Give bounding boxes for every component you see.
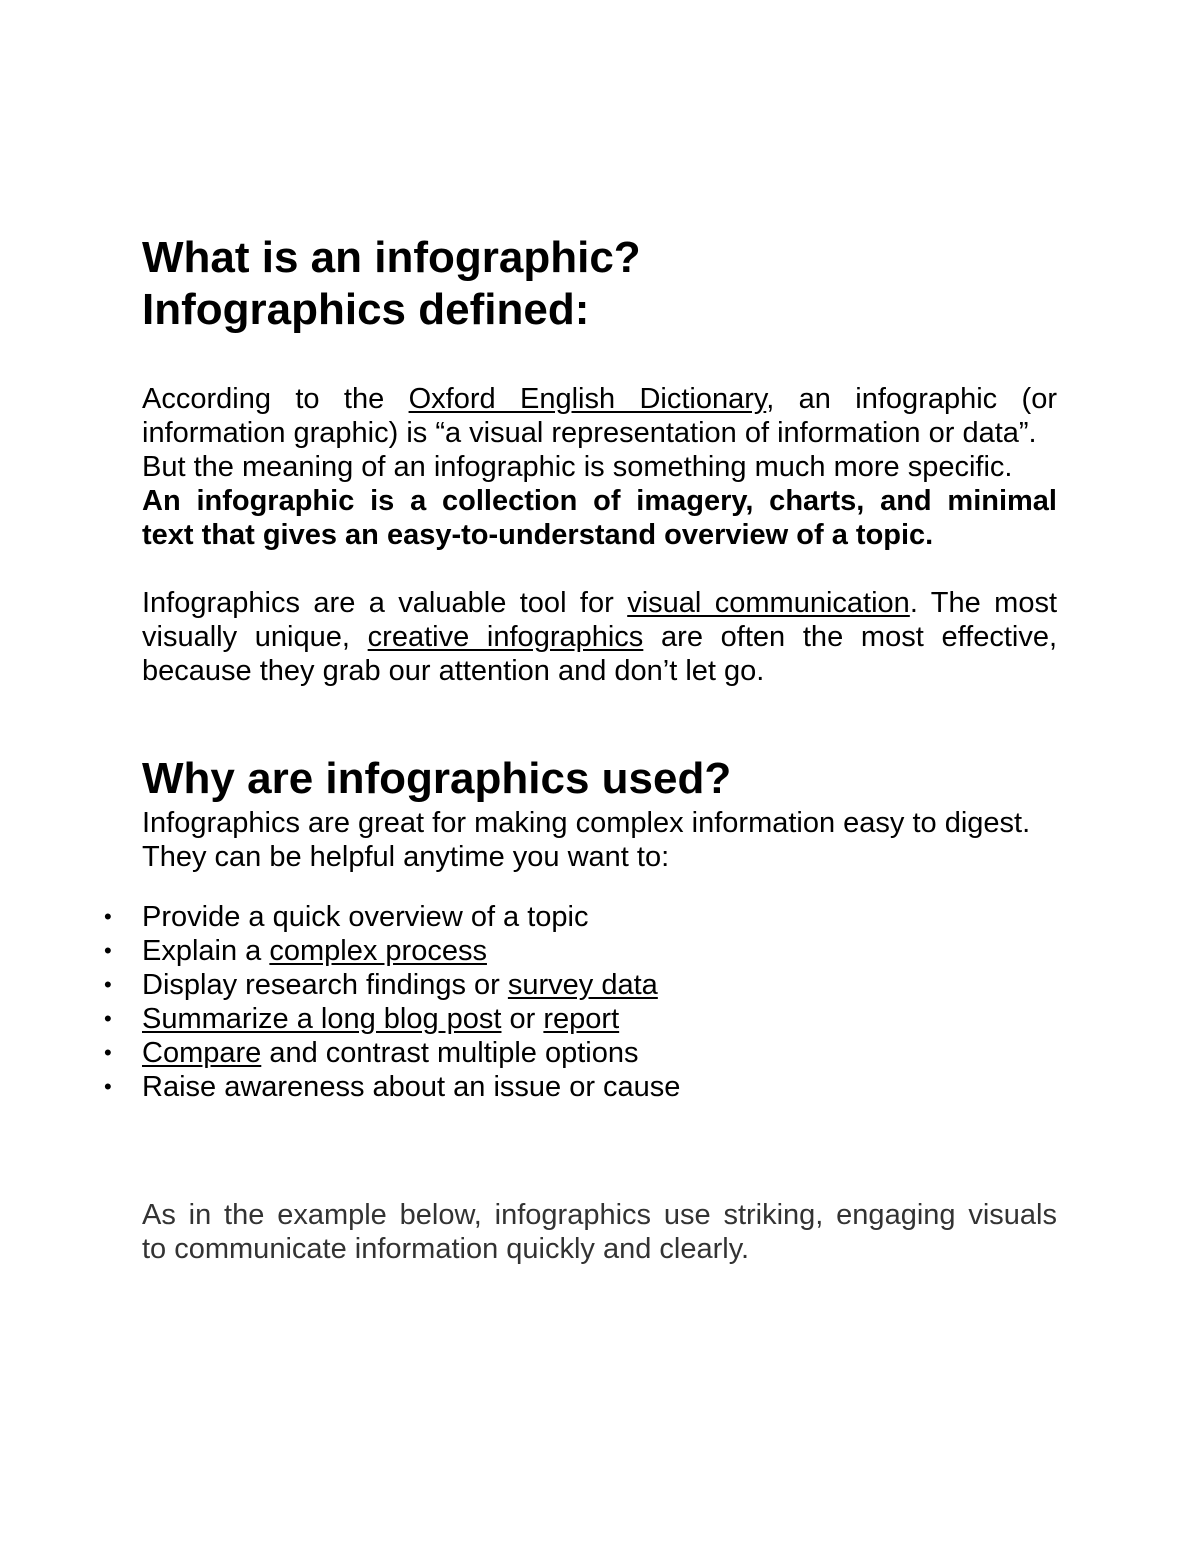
text block: definition: information graphic) is “a visual representation of information or data”.: [142, 417, 1037, 449]
text block: definition: An infographic is a collection of imagery, charts, and minimal: [142, 485, 1057, 517]
text block: value: Infographics are a valuable tool for visual communication. The most: [142, 587, 1057, 619]
text block: value: [142, 587, 1057, 687]
text block: definition: But the meaning of an infographic is something much more specific.: [142, 451, 1012, 483]
bullet list: •: [104, 904, 112, 929]
bullet list: Display research findings or survey data: [142, 969, 658, 1001]
bullet list: Compare and contrast multiple options: [142, 1037, 638, 1069]
bullet list: [104, 901, 680, 1103]
bullet list: •: [104, 1074, 112, 1099]
heading: why: Why are infographics used?: [142, 754, 731, 803]
subtitle: Infographics defined:: [142, 285, 589, 334]
text block: closing: [142, 1199, 1057, 1265]
text block: definition: According to the Oxford English Dictionary, an infographic (or: [142, 383, 1057, 415]
text block: definition: text that gives an easy-to-understand overview of a topic.: [142, 519, 933, 551]
bullet list: Provide a quick overview of a topic: [142, 901, 588, 933]
bullet list: •: [104, 1006, 112, 1031]
bullet list: Explain a complex process: [142, 935, 487, 967]
bullet list: Raise awareness about an issue or cause: [142, 1071, 680, 1103]
text block: why intro: They can be helpful anytime you want to:: [142, 841, 669, 873]
text block: closing: to communicate information quickly and clearly.: [142, 1233, 749, 1265]
text block: closing: As in the example below, infographics use striking, engaging visuals: [142, 1199, 1057, 1231]
bullet list: •: [104, 1040, 112, 1065]
bullet list: Summarize a long blog post or report: [142, 1003, 619, 1035]
text block: value: visually unique, creative infographics are often the most effective,: [142, 621, 1057, 653]
bullet list: •: [104, 938, 112, 963]
text block: why intro: Infographics are great for making complex information easy to digest.: [142, 807, 1030, 839]
text block: why intro: [142, 807, 1030, 873]
bullet list: •: [104, 972, 112, 997]
text block: definition: [142, 383, 1057, 551]
title: What is an infographic?: [142, 233, 641, 282]
text block: value: because they grab our attention and don’t let go.: [142, 655, 764, 687]
